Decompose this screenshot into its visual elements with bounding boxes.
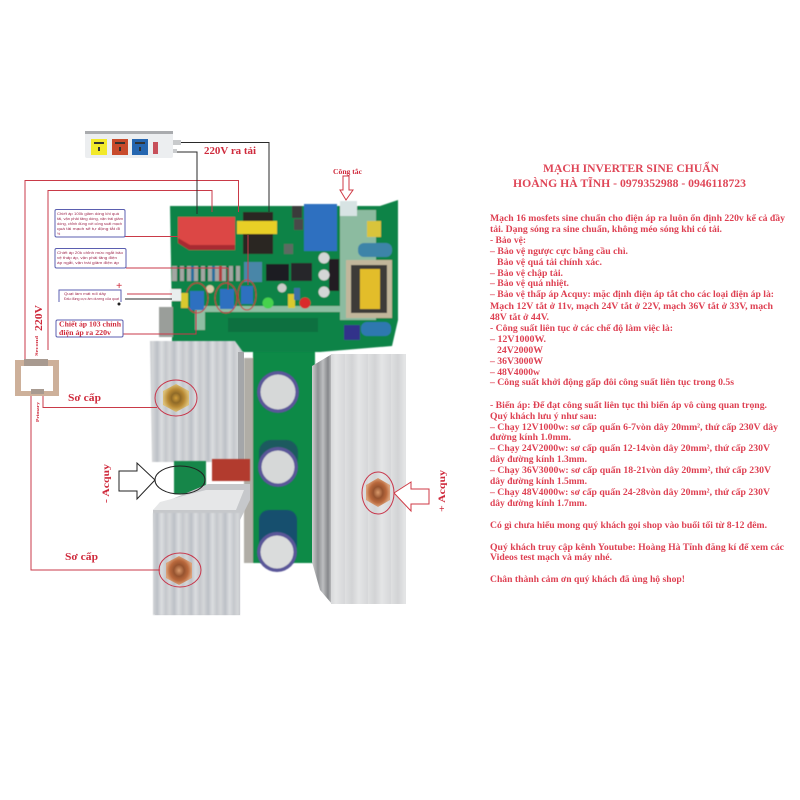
right heat sink — [312, 354, 406, 604]
text block: product description and protections: – Bảo vệ chập tải. — [489, 268, 563, 279]
text block: continuous power: – Công suất khởi động gấp đôi công suất liên tục trong 0.5s — [489, 377, 734, 388]
blue cylinder capacitor — [358, 243, 392, 257]
text block: continuous power: 24V2000W — [497, 345, 543, 356]
text block: continuous power: - Công suất liên tục ở các chế độ làm việc là: — [490, 323, 673, 334]
resistor row — [172, 262, 262, 282]
polarity plus sign: + — [116, 280, 122, 292]
callout: switch wiring note: Quạt làm mát nối dây — [64, 292, 106, 296]
output filter capacitors — [344, 322, 391, 340]
toroidal transformer — [15, 359, 59, 396]
blue socket — [132, 139, 148, 155]
blue relay — [304, 204, 337, 251]
negative terminal label: - Acquy — [101, 463, 111, 503]
red socket — [112, 139, 128, 155]
text block: product description and protections: - Bảo vệ: — [490, 235, 526, 246]
text block: contact and thanks: Quý khách truy cập kênh Youtube: Hoàng Hà Tĩnh đăng kí để xem các — [490, 542, 785, 553]
centre small board — [174, 459, 250, 494]
callout: 103 potentiometer note: Chiết áp 103 chỉnh — [59, 320, 122, 328]
red highlight ring — [362, 472, 394, 514]
callout: upper potentiometer note — [55, 210, 125, 237]
text block: product description and protections: 48V tắt ở 44V. — [490, 312, 549, 323]
text block: continuous power — [489, 323, 734, 388]
bottom-left heat sink — [153, 484, 250, 615]
output label: 220V ra tải — [204, 146, 256, 157]
title — [513, 160, 746, 190]
primary label: Primary — [35, 401, 40, 422]
text block: transformer winding notes: – Chạy 12V1000w: sơ cấp quấn 6-7vòn dây 20mm², thứ cấp 230V dây — [489, 422, 778, 433]
text block: product description and protections — [489, 213, 785, 323]
brass nut — [163, 384, 189, 412]
text block: transformer winding notes: dây đường kính 1.7mm. — [490, 498, 587, 509]
text block: transformer winding notes: – Chạy 24V2000w: sơ cấp quấn 12-14vòn dây 20mm², thứ cấp 230V — [489, 443, 770, 454]
callout: lower potentiometer note: áp ngắt, vặn trái giảm điện áp — [57, 260, 119, 265]
callout: upper potentiometer note: dòng, chỉnh đúng với công suất mạch — [57, 222, 122, 226]
text block: product description and protections: Bảo vệ quá tải chính xác. — [497, 257, 602, 268]
secondary label: Second — [34, 335, 39, 356]
negative terminal arrow — [119, 463, 155, 499]
callout: lower potentiometer note: Chiết áp 20k chỉnh mức ngắt bảo — [57, 250, 123, 255]
text block: contact and thanks: Chân thành cảm ơn quý khách đã ủng hộ shop! — [490, 574, 685, 585]
lower power board — [244, 335, 315, 563]
integrated circuits — [266, 259, 339, 291]
callout: 103 potentiometer note — [56, 320, 123, 337]
switch connector — [340, 201, 357, 216]
top-left heat sink — [150, 341, 244, 462]
blue trimmer potentiometers — [186, 280, 256, 313]
text block: product description and protections: Mạch 12V tắt ở 11v, mạch 24V tắt ở 22V, mạch 36V tắt ở 33V, mạch — [490, 301, 774, 312]
callout: upper potentiometer note: % — [57, 232, 61, 236]
vertical 220V label: 220V — [34, 304, 45, 331]
title: HOÀNG HÀ TĨNH - 0979352988 - 0946118723 — [513, 176, 746, 190]
copper nut — [166, 556, 192, 585]
black wiring — [125, 142, 269, 299]
callout: upper potentiometer note: tải, vặn phải tăng dòng, vặn trái giảm — [57, 217, 123, 221]
lower primary label: Sơ cấp — [65, 552, 98, 563]
red film capacitor — [178, 217, 235, 250]
upper primary label: Sơ cấp — [68, 393, 101, 404]
text block: contact and thanks: Videos test mạch và máy nhé. — [490, 552, 612, 563]
small regulators — [284, 206, 303, 254]
positive terminal label: + Acquy — [437, 469, 447, 512]
callout: switch wiring note — [59, 290, 121, 302]
power switch — [153, 142, 158, 154]
text block: product description and protections: – Bảo vệ ngược cực bằng cầu chì. — [489, 246, 628, 257]
grey side connector — [159, 307, 173, 337]
small yellow capacitor — [367, 221, 381, 237]
main control board — [159, 200, 398, 352]
red highlight ring — [159, 553, 201, 587]
red highlight ring — [155, 380, 197, 416]
text block: transformer winding notes: Quý khách lưu ý như sau: — [490, 411, 597, 422]
switch arrow — [340, 176, 353, 200]
yellow-core transformer — [346, 260, 392, 318]
small electrolytic capacitors — [206, 252, 330, 298]
callout: upper potentiometer note: Chiết áp 100k giảm dòng khi quá — [57, 212, 119, 216]
callout: upper potentiometer note: quá tải mạch sẽ tự động tắt đi — [57, 226, 120, 231]
LEDs and small capacitors — [181, 288, 310, 308]
text block: transformer winding notes: dây đường kính 1.5mm. — [490, 476, 587, 487]
text block: transformer winding notes: đường kính 1.0mm. — [490, 432, 571, 443]
text block: continuous power: – 48V4000w — [489, 367, 540, 378]
callout: 103 potentiometer note: điện áp ra 220v — [59, 328, 111, 337]
text block: continuous power: – 36V3000W — [489, 356, 543, 367]
copper nut — [366, 478, 390, 507]
large capacitors — [257, 371, 299, 572]
text block: transformer winding notes — [489, 400, 778, 509]
switch label: Công tắc — [333, 168, 362, 176]
negative terminal highlight — [155, 466, 205, 494]
inductor with yellow capacitor — [237, 212, 277, 254]
text block: contact and thanks: Có gì chưa hiểu mong quý khách gọi shop vào buổi tối từ 8-12 đêm. — [490, 520, 767, 531]
text block: transformer winding notes: – Chạy 48V4000w: sơ cấp quấn 24-28vòn dây 20mm², thứ cấp 230V — [489, 487, 770, 498]
red wiring — [25, 180, 248, 570]
text block: transformer winding notes: dây đường kính 1.3mm. — [490, 454, 587, 465]
polarity minus dot — [118, 302, 120, 306]
text block: transformer winding notes: – Chạy 36V3000w: sơ cấp quấn 18-21vòn dây 20mm², thứ cấp 230V — [489, 465, 771, 476]
text block: product description and protections: – Bảo vệ quá nhiệt. — [489, 278, 569, 289]
positive terminal arrow — [394, 482, 429, 511]
text block: continuous power: – 12V1000W. — [489, 334, 546, 345]
callout: lower potentiometer note — [55, 248, 126, 268]
white connector — [170, 289, 181, 301]
callout: switch wiring note: Đấu đúng cực âm dương của quạt — [64, 297, 119, 301]
power strip — [85, 131, 181, 158]
title: MẠCH INVERTER SINE CHUẨN — [543, 160, 720, 175]
callout: lower potentiometer note: vệ thấp áp, vặn phải tăng điện — [57, 256, 117, 260]
text block: product description and protections: – Bảo vệ thấp áp Acquy: mặc định điện áp tắt cho các loại điện áp là: — [489, 289, 774, 300]
text block: transformer winding notes: - Biến áp: Để đạt công suất liên tục thì biến áp vô cùng quan trọng. — [490, 400, 767, 411]
yellow socket — [91, 139, 107, 155]
text block: product description and protections: tải. Dạng sóng ra sine chuẩn, không méo sóng khi có tải. — [490, 224, 722, 235]
text block: contact and thanks — [490, 520, 785, 585]
text block: product description and protections: Mạch 16 mosfets sine chuẩn cho điện áp ra luôn ổn định 220v kể cả đầy — [490, 213, 785, 224]
